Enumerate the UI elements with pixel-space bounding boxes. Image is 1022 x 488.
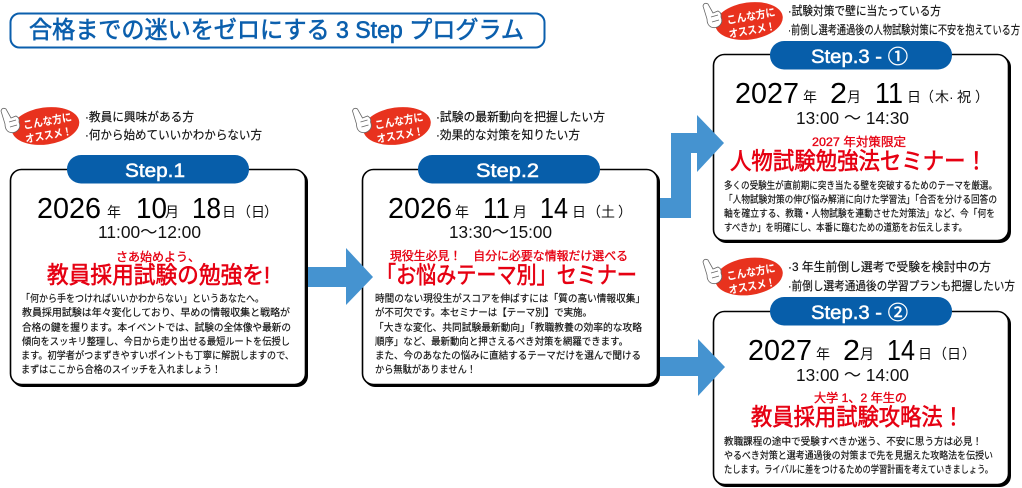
panel: Step.2 (362, 155, 660, 387)
icon: pointing hand (703, 259, 722, 284)
step 2 description: 「大きな変化、共同試験最新動向」「教職教養の効率的な攻略 (374, 321, 642, 334)
arrow: Step.1 to Step.2 (308, 248, 373, 305)
recommendation text Step.2: ·試験の最新動向を把握したい方 (436, 109, 605, 124)
step 2 pill (418, 155, 600, 184)
step 3-1 date: 2027 (735, 78, 799, 110)
step 2 description: また、今のあなたの悩みに直結するテーマだけを選んで聞ける (375, 349, 641, 362)
step 1 date: 日 (222, 204, 236, 220)
step 1 pill (67, 155, 249, 184)
arrow: Step.2 to Step.3-1 (660, 115, 724, 218)
step 2 description: 順序」など、最新動向と押さえるべき対策を網羅できます。 (375, 335, 628, 348)
step 2 date: 月 (513, 204, 527, 220)
step 1 time: 11:00〜12:00 (98, 222, 201, 242)
step 2 date: 年 (455, 204, 469, 220)
badge: recommendation Step.3-1: オススメ！ (728, 20, 776, 41)
recommendation text Step.3-1 (788, 3, 1020, 37)
step 3-1 date (735, 78, 989, 110)
step 3-2 heading: 教員採用試験攻略法！ (751, 404, 964, 430)
step 2 date: 日 (572, 204, 586, 220)
step 1 description: 「何から手をつければいいかわからない」というあなたへ。 (21, 292, 264, 305)
step 2 heading: 「お悩みテーマ別」セミナー (376, 262, 637, 288)
step 1 description: 教員採用試験は年々変化しており、早めの情報収集と戦略が (22, 306, 290, 319)
panel: Step.3-1 (714, 41, 1011, 243)
step 3-2 date: 2027 (748, 335, 812, 367)
badge: recommendation Step.2: こんな方に (374, 110, 424, 132)
step 3-2 date: 月 (860, 346, 874, 362)
step 3-2 date: 日 (918, 346, 932, 362)
step 2 subheading: 現役生必見！ 自分に必要な情報だけ選べる (390, 248, 628, 263)
step 2 date: 11 (483, 193, 510, 225)
step 1 date: 18 (192, 193, 221, 225)
step 2 description: が不可欠です。本セミナーは【テーマ別】で実施。 (375, 306, 592, 319)
step 1 description: 合格の鍵を握ります。本イベントでは、試験の全体像や最新の (22, 321, 291, 334)
step 2 description: から無駄がありません！ (375, 363, 476, 376)
step 3-2 date: 14 (887, 335, 915, 367)
icon: pointing hand (1, 108, 20, 133)
step 3-2 date: （日） (933, 346, 976, 362)
recommendation text Step.3-1: ·試験対策で壁に当たっている方 (788, 3, 941, 18)
step 3-2 date: 年 (816, 346, 830, 362)
step 3-1 date: （木·祝） (920, 89, 989, 105)
title: 合格までの迷いをゼロにする 3 Step プログラム (29, 17, 524, 44)
step 3-1 date: 11 (875, 78, 903, 110)
step 2 date: 2026 (388, 193, 452, 225)
step 3-2 time: 13:00 〜 14:00 (796, 365, 909, 385)
badge: recommendation Step.2 (352, 103, 433, 149)
step 1 description (21, 292, 294, 376)
step 3-1 pill (770, 41, 952, 70)
recommendation text Step.1: ·何から始めていいかわからない方 (85, 127, 262, 142)
step 3-2 description (724, 435, 993, 476)
step 1 description: まずはここから合格のスイッチを入れましょう！ (21, 363, 221, 376)
recommendation text Step.2: ·効果的な対策を知りたい方 (436, 127, 580, 142)
step 3-1 date: 月 (847, 89, 861, 105)
step 2 date: （土） (587, 204, 632, 220)
step 3-1 date: 日 (907, 89, 921, 105)
icon: pointing hand (352, 108, 371, 133)
badge: recommendation Step.3-1 (703, 0, 785, 44)
recommendation text Step.3-2: ·3 年生前倒し選考で受験を検討中の方 (788, 259, 991, 274)
recommendation text Step.1 (85, 109, 262, 142)
step 2 time: 13:30〜15:00 (449, 222, 552, 242)
badge: recommendation Step.1: オススメ！ (24, 125, 73, 146)
step 1 description: 傾向をスッキリ整理し、今日から走り出せる最短ルートを伝授し (22, 335, 290, 348)
step 3-1 description: すべきか」を明確にし、本番に臨むための道筋をお伝えします。 (724, 221, 967, 234)
step 1 description: ます。初学者がつまずきやすいポイントも丁寧に解説しますので、 (21, 349, 294, 362)
step 1 date: 年 (107, 204, 121, 220)
step 3-2 date: 2 (843, 335, 860, 367)
step 3-2 description: 教職課程の途中で受験すべきか迷う、不安に思う方は必見！ (724, 435, 982, 448)
step 1 heading: 教員採用試験の勉強を! (47, 262, 270, 288)
step 3-1 description (724, 179, 997, 234)
icon: pointing hand (703, 3, 722, 28)
badge: recommendation Step.2: オススメ！ (376, 125, 424, 146)
badge: recommendation Step.3-2: オススメ！ (728, 276, 776, 297)
panel: Step.1 (10, 155, 308, 387)
step 3-1 time: 13:00 〜 14:30 (796, 108, 909, 128)
step 3-1 heading: 人物試験勉強法セミナー！ (730, 148, 987, 174)
step 3-2 description: やるべき対策と選考通過後の対策まで先を見据えた攻略法を伝授い (724, 449, 993, 462)
step 1 pill: Step.1 (125, 161, 185, 182)
badge: recommendation Step.3-1: こんな方に (726, 5, 776, 27)
step 1 date: 月 (165, 204, 179, 220)
recommendation text Step.3-2 (788, 259, 1015, 293)
step 3-2 pill: Step.3 - ② (811, 302, 908, 324)
step 3-1 date: 年 (803, 89, 817, 105)
step 1 date (37, 193, 278, 225)
step 3-1 date: 2 (830, 78, 847, 110)
badge: recommendation Step.1: こんな方に (22, 110, 73, 132)
step 2 pill: Step.2 (476, 161, 539, 182)
step 2 date (388, 193, 632, 225)
step 3-2 pill (770, 297, 952, 326)
step 3-2 date (748, 335, 976, 367)
arrow: Step.2 to Step.3-2 (660, 339, 725, 396)
step 3-1 pill: Step.3 - ① (811, 46, 908, 68)
recommendation text Step.1: ·教員に興味がある方 (85, 109, 194, 124)
step 1 date: （日） (237, 204, 278, 220)
step 2 description: 時間のない現役生がスコアを伸ばすには「質の高い情報収集」 (375, 292, 645, 305)
step 2 description (374, 292, 645, 376)
step 3-2 subheading: 大学 1、2 年生の (814, 390, 907, 405)
badge: recommendation Step.1 (1, 103, 82, 149)
step 2 date: 14 (540, 193, 568, 225)
step 1 date: 10 (136, 193, 167, 225)
badge: recommendation Step.3-2: こんな方に (726, 261, 776, 283)
recommendation text Step.2 (436, 109, 605, 142)
step 1 date: 2026 (37, 193, 101, 225)
badge: recommendation Step.3-2 (703, 253, 785, 300)
step 3-1 subheading: 2027 年対策限定 (812, 135, 906, 149)
panel: Step.3-2 (714, 297, 1011, 487)
step 1 subheading: さあ始めよう、 (116, 250, 200, 264)
